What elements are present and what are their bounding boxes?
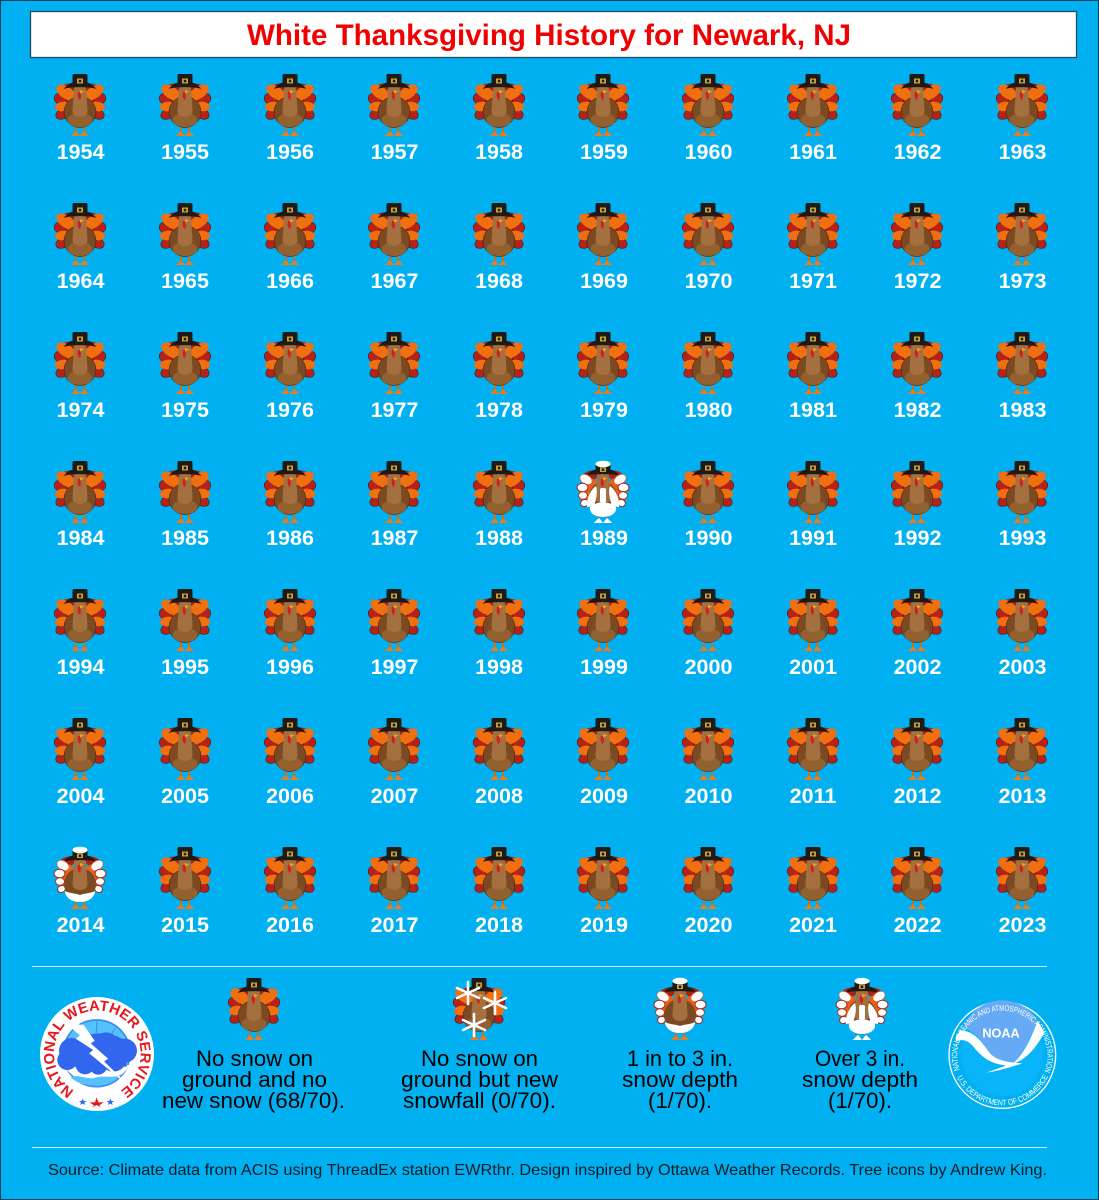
year 1964 xyxy=(52,203,108,293)
year 2006 xyxy=(262,718,318,808)
year 1984 xyxy=(52,461,108,550)
year 1965 xyxy=(157,203,213,293)
title xyxy=(30,12,1076,58)
year 1980: 1980 xyxy=(685,398,732,422)
year 1959 xyxy=(575,74,631,164)
year 2023 xyxy=(994,847,1050,937)
logo: National Weather Service: NATIONAL WEATHER SERVICE xyxy=(44,1000,151,1098)
logo: NOAA xyxy=(948,1000,1056,1109)
year 1987: 1987 xyxy=(371,526,418,550)
year 1977: 1977 xyxy=(371,398,418,422)
year 1954: 1954 xyxy=(57,140,104,164)
legend item: new snowfall only: ground but new xyxy=(401,1067,558,1092)
year 1966 xyxy=(262,203,318,293)
year 1989: over 3 in. snow depth xyxy=(577,461,629,550)
year 2003 xyxy=(994,589,1050,679)
year 2020: 2020 xyxy=(685,913,732,937)
year 2012: 2012 xyxy=(894,784,941,808)
year 2001 xyxy=(785,589,841,679)
year 2000 xyxy=(680,589,736,679)
year 1983: 1983 xyxy=(999,398,1046,422)
year 1982: 1982 xyxy=(894,398,941,422)
year 2021 xyxy=(785,847,841,937)
legend item: 1 to 3 in.: snow depth xyxy=(622,1067,738,1092)
legend xyxy=(162,978,918,1113)
year 2008: 2008 xyxy=(475,784,523,808)
year 2017: 2017 xyxy=(371,913,418,937)
year 1967: 1967 xyxy=(371,269,418,293)
year 1976: 1976 xyxy=(266,398,314,422)
year 1980 xyxy=(680,332,736,422)
year 1986 xyxy=(262,461,318,550)
year 2010 xyxy=(680,718,736,808)
logo: NOAA: NOAA xyxy=(982,1026,1020,1041)
year 1982 xyxy=(889,332,945,422)
year 2016 xyxy=(262,847,318,937)
year 1957 xyxy=(366,74,422,164)
legend item: no snow xyxy=(162,978,345,1113)
logo: NOAA: U.S. DEPARTMENT OF COMMERCE xyxy=(958,1074,1048,1106)
year 1974 xyxy=(52,332,108,422)
year 1992: 1992 xyxy=(894,526,941,550)
year 2015: 2015 xyxy=(161,913,209,937)
year 1979 xyxy=(575,332,631,422)
year 2003: 2003 xyxy=(999,655,1046,679)
year 1972: 1972 xyxy=(894,269,941,293)
year 2001: 2001 xyxy=(789,655,837,679)
year 1981: 1981 xyxy=(789,398,837,422)
year 1997 xyxy=(366,589,422,679)
year 1991 xyxy=(785,461,841,550)
year 1999: 1999 xyxy=(580,655,628,679)
year 2010: 2010 xyxy=(685,784,732,808)
year 2005: 2005 xyxy=(161,784,209,808)
year 2023: 2023 xyxy=(999,913,1046,937)
legend item: no snow: new snow (68/70). xyxy=(162,1088,345,1113)
year 1970 xyxy=(680,203,736,293)
year 2004: 2004 xyxy=(57,784,104,808)
year 1962: 1962 xyxy=(894,140,941,164)
year 1973: 1973 xyxy=(999,269,1046,293)
year 1995 xyxy=(157,589,213,679)
year 2018 xyxy=(471,847,527,937)
year 1968 xyxy=(471,203,527,293)
year 2009 xyxy=(575,718,631,808)
year 1954 xyxy=(52,74,108,164)
year 2011: 2011 xyxy=(790,784,836,808)
legend item: over 3 in. xyxy=(802,978,918,1113)
year 1964: 1964 xyxy=(57,269,104,293)
year 1972 xyxy=(889,203,945,293)
year 1981 xyxy=(785,332,841,422)
year 1978: 1978 xyxy=(475,398,523,422)
year 1998: 1998 xyxy=(475,655,523,679)
year 1993 xyxy=(994,461,1050,550)
year 1983 xyxy=(994,332,1050,422)
source note: Source: Climate data from ACIS using ThreadEx station EWRthr. Design inspired by Ottawa Weather Records. Tree icons by Andrew King. xyxy=(48,1162,1047,1179)
year 1996 xyxy=(262,589,318,679)
year 1963: 1963 xyxy=(999,140,1046,164)
year 1976 xyxy=(262,332,318,422)
year 2000: 2000 xyxy=(685,655,732,679)
year 1986: 1986 xyxy=(266,526,314,550)
year 1971 xyxy=(785,203,841,293)
year 2014: 1 in to 3 in. snow depth: 2014 xyxy=(57,913,104,937)
year 2014: 1 in to 3 in. snow depth xyxy=(54,847,106,937)
year 1998 xyxy=(471,589,527,679)
year 1958: 1958 xyxy=(475,140,523,164)
year 1990 xyxy=(680,461,736,550)
year 2015 xyxy=(157,847,213,937)
year 1963 xyxy=(994,74,1050,164)
year 1975: 1975 xyxy=(161,398,209,422)
year 2002 xyxy=(889,589,945,679)
year 2013: 2013 xyxy=(999,784,1046,808)
year 1973 xyxy=(994,203,1050,293)
year 1992 xyxy=(889,461,945,550)
year 1961: 1961 xyxy=(789,140,837,164)
year 1979: 1979 xyxy=(580,398,628,422)
year 1961 xyxy=(785,74,841,164)
title: White Thanksgiving History for Newark, NJ xyxy=(247,19,851,52)
logo: NOAA: NATIONAL OCEANIC AND ATMOSPHERIC ADMINISTRATION xyxy=(952,1005,1053,1073)
year 1967 xyxy=(366,203,422,293)
year 1969: 1969 xyxy=(580,269,628,293)
year 2019 xyxy=(575,847,631,937)
year 1975 xyxy=(157,332,213,422)
year 1960: 1960 xyxy=(685,140,732,164)
year 1988: 1988 xyxy=(475,526,523,550)
legend item: new snowfall only: snowfall (0/70). xyxy=(403,1088,556,1113)
turkey grid: 1954-2023 xyxy=(52,74,1050,937)
year 1969 xyxy=(575,203,631,293)
year 2018: 2018 xyxy=(475,913,523,937)
year 2022 xyxy=(889,847,945,937)
year 1965: 1965 xyxy=(161,269,209,293)
year 2007: 2007 xyxy=(371,784,418,808)
year 1958 xyxy=(471,74,527,164)
year 1984: 1984 xyxy=(57,526,104,550)
year 1955: 1955 xyxy=(161,140,209,164)
legend item: new snowfall only xyxy=(401,978,558,1113)
year 1956: 1956 xyxy=(266,140,314,164)
year 1962 xyxy=(889,74,945,164)
year 1959: 1959 xyxy=(580,140,628,164)
year 2011 xyxy=(785,718,841,808)
year 1990: 1990 xyxy=(685,526,732,550)
year 2009: 2009 xyxy=(580,784,628,808)
year 1978 xyxy=(471,332,527,422)
year 1993: 1993 xyxy=(999,526,1046,550)
legend item: 1 to 3 in.: 1 in to 3 in. xyxy=(627,1046,733,1071)
year 1994 xyxy=(52,589,108,679)
year 2016: 2016 xyxy=(266,913,314,937)
legend item: 1 to 3 in.: (1/70). xyxy=(648,1088,712,1113)
year 1999 xyxy=(575,589,631,679)
year 2020 xyxy=(680,847,736,937)
year 2002: 2002 xyxy=(894,655,941,679)
legend item: over 3 in.: snow depth xyxy=(802,1067,918,1092)
year 2021: 2021 xyxy=(789,913,837,937)
year 1957: 1957 xyxy=(371,140,418,164)
year 1985 xyxy=(157,461,213,550)
year 2013 xyxy=(994,718,1050,808)
year 2007 xyxy=(366,718,422,808)
year 1997: 1997 xyxy=(371,655,418,679)
year 1968: 1968 xyxy=(475,269,523,293)
year 2019: 2019 xyxy=(580,913,628,937)
year 1977 xyxy=(366,332,422,422)
year 1987 xyxy=(366,461,422,550)
legend item: 1 to 3 in. xyxy=(622,978,738,1113)
year 2005 xyxy=(157,718,213,808)
legend item: new snowfall only: No snow on xyxy=(421,1046,538,1071)
year 1989: over 3 in. snow depth: 1989 xyxy=(580,526,628,550)
legend item: over 3 in.: (1/70). xyxy=(828,1088,892,1113)
year 1985: 1985 xyxy=(161,526,209,550)
year 1991: 1991 xyxy=(789,526,837,550)
legend item: no snow: ground and no xyxy=(182,1067,327,1092)
legend item: over 3 in.: Over 3 in. xyxy=(815,1046,905,1071)
year 1956 xyxy=(262,74,318,164)
legend item: no snow: No snow on xyxy=(196,1046,313,1071)
year 1996: 1996 xyxy=(266,655,314,679)
year 1966: 1966 xyxy=(266,269,314,293)
year 2022: 2022 xyxy=(894,913,941,937)
year 1995: 1995 xyxy=(161,655,209,679)
year 2012 xyxy=(889,718,945,808)
year 2006: 2006 xyxy=(266,784,314,808)
year 2017 xyxy=(366,847,422,937)
year 2008 xyxy=(471,718,527,808)
year 1971: 1971 xyxy=(789,269,837,293)
year 1960 xyxy=(680,74,736,164)
year 1994: 1994 xyxy=(57,655,104,679)
year 1970: 1970 xyxy=(685,269,732,293)
year 1988 xyxy=(471,461,527,550)
year 2004 xyxy=(52,718,108,808)
year 1955 xyxy=(157,74,213,164)
year 1974: 1974 xyxy=(57,398,104,422)
